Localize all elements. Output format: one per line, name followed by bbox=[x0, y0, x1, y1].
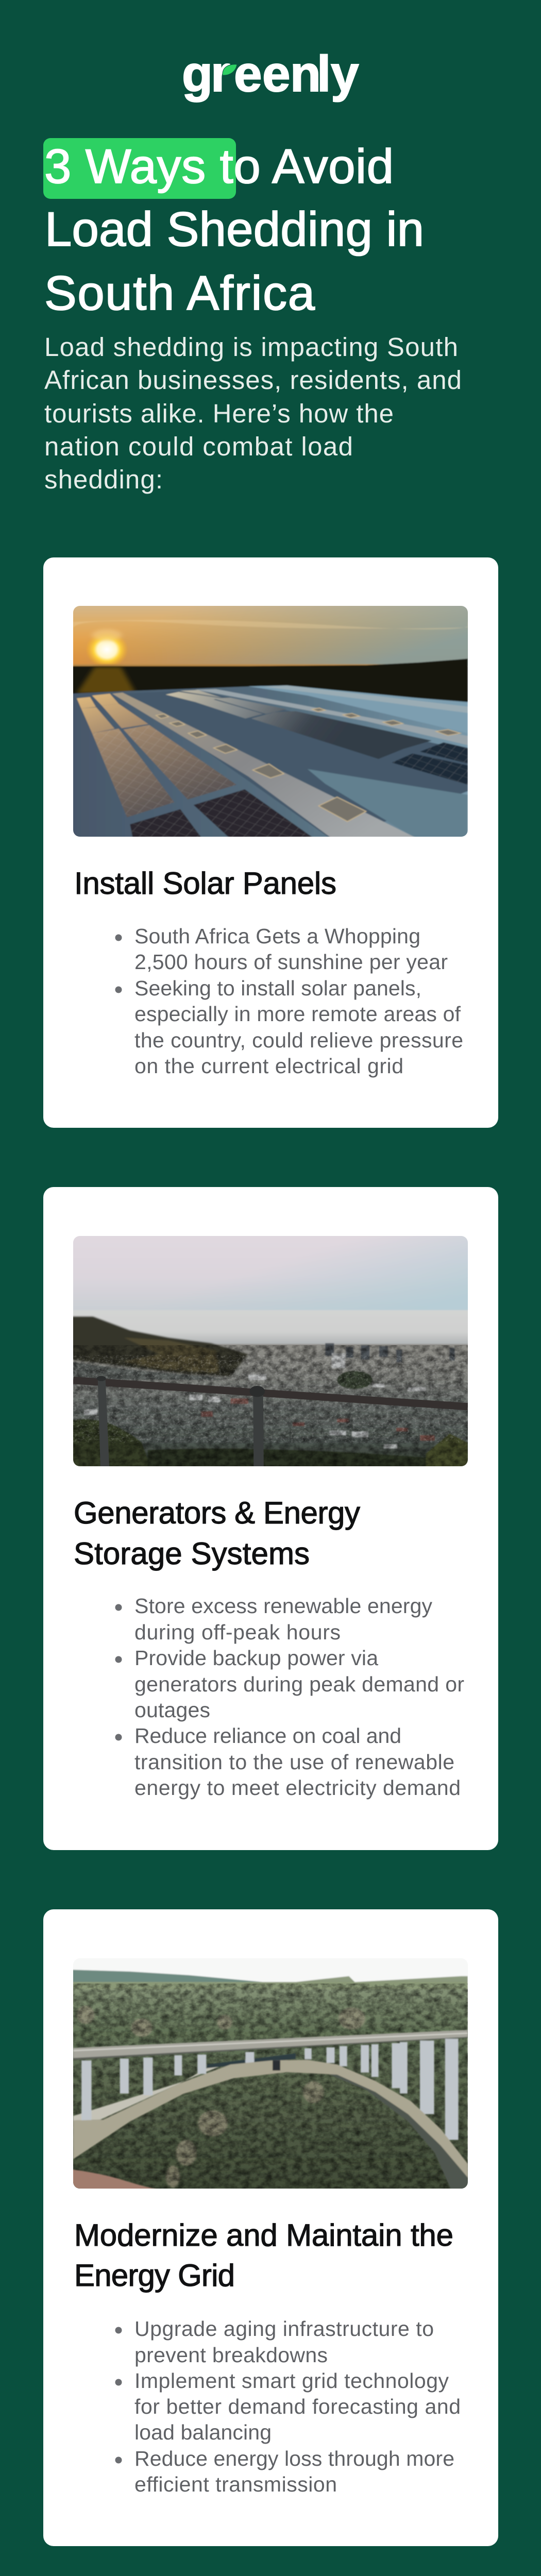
bullet list: 2,500 hours of sunshine per year bbox=[134, 950, 448, 974]
card background bbox=[43, 557, 498, 1128]
panel: generators and storage bbox=[43, 1187, 498, 1850]
panel: modernize the grid bbox=[43, 1909, 498, 2546]
title bbox=[43, 138, 424, 320]
logo: greenly: greenly bbox=[182, 45, 359, 102]
title: Load Shedding in bbox=[45, 202, 424, 256]
intro text: African businesses, residents, and bbox=[44, 365, 462, 395]
title highlight bbox=[43, 138, 236, 199]
bullet list: Reduce reliance on coal and bbox=[134, 1724, 401, 1748]
bullet list: energy to meet electricity demand bbox=[134, 1776, 461, 1800]
bullet list: Implement smart grid technology bbox=[134, 2369, 449, 2393]
bullet list: Upgrade aging infrastructure to bbox=[134, 2317, 434, 2341]
bullet list: Seeking to install solar panels, bbox=[134, 976, 421, 1000]
bullet list: transition to the use of renewable bbox=[134, 1750, 454, 1774]
heading: Install Solar Panels bbox=[74, 866, 336, 901]
heading: Modernize and Maintain the bbox=[74, 2218, 453, 2252]
bullet list bbox=[115, 924, 463, 1078]
title: South Africa bbox=[44, 266, 315, 320]
bullet list: the country, could relieve pressure bbox=[134, 1028, 463, 1052]
heading: Generators & Energy bbox=[74, 1496, 360, 1530]
bullet list: load balancing bbox=[134, 2420, 272, 2444]
intro text bbox=[44, 332, 462, 494]
heading: Energy Grid bbox=[74, 2258, 235, 2293]
bullet list: for better demand forecasting and bbox=[134, 2395, 461, 2418]
bullet list: Provide backup power via bbox=[134, 1646, 378, 1670]
photo: solar panels at sunset bbox=[71, 604, 470, 839]
bullet list: on the current electrical grid bbox=[134, 1054, 403, 1078]
texture bbox=[73, 1345, 468, 1466]
panel: install solar panels bbox=[43, 557, 498, 1128]
heading: Storage Systems bbox=[74, 1536, 310, 1571]
title: 3 Ways to Avoid bbox=[44, 139, 394, 193]
bullet list: Reduce energy loss through more bbox=[134, 2447, 454, 2470]
intro text: tourists alike. Here’s how the bbox=[44, 399, 394, 428]
bullet list: outages bbox=[134, 1698, 210, 1722]
photo: city view behind railing bbox=[71, 1234, 470, 1467]
bullet list bbox=[115, 2317, 461, 2496]
bullet list bbox=[115, 1594, 464, 1800]
bullet list: efficient transmission bbox=[134, 2472, 337, 2496]
icon: leaf bbox=[223, 64, 237, 75]
bullet list: South Africa Gets a Whopping bbox=[134, 924, 420, 948]
bullet list: Store excess renewable energy bbox=[134, 1594, 433, 1618]
card background bbox=[43, 1909, 498, 2546]
bullet list: during off-peak hours bbox=[134, 1620, 341, 1644]
card background bbox=[43, 1187, 498, 1850]
bullet list: generators during peak demand or bbox=[134, 1672, 464, 1696]
photo: arch bridge over gorge bbox=[71, 1957, 470, 2190]
intro text: nation could combat load bbox=[44, 432, 353, 461]
bullet list: especially in more remote areas of bbox=[134, 1002, 461, 1026]
intro text: shedding: bbox=[44, 465, 163, 494]
bullet list: prevent breakdowns bbox=[134, 2343, 328, 2367]
texture bbox=[73, 1984, 468, 2189]
heading bbox=[74, 1496, 360, 1571]
intro text: Load shedding is impacting South bbox=[44, 332, 458, 362]
heading bbox=[74, 2218, 453, 2293]
